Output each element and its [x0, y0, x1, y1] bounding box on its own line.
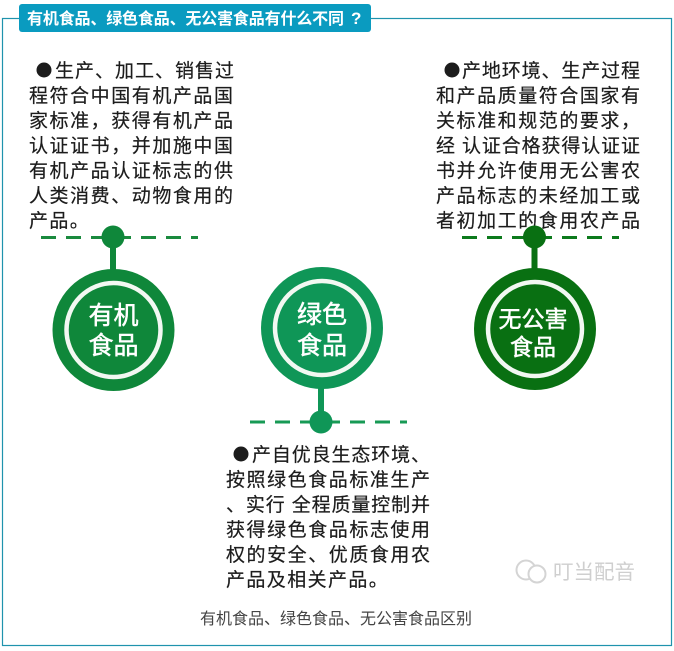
badge: pollution-free food: [462, 226, 619, 390]
caption: 有机食品、绿色食品、无公害食品区别: [200, 610, 472, 628]
text block: green food definition: 按照绿色食品标准生产: [226, 469, 430, 491]
text block: pollution-free food definition: 书并允许使用无公害农: [436, 160, 640, 182]
badge: pollution-free food: 无公害: [498, 306, 568, 332]
badge: green food: 食品: [297, 332, 347, 360]
text block: organic food definition: [29, 60, 234, 232]
text block: organic food definition: 有机产品认证标志的供: [29, 160, 233, 182]
text block: pollution-free food definition: 经 认证合格获得认证证: [436, 135, 640, 157]
text block: organic food definition: 生产、加工、销售过: [55, 60, 234, 82]
text block: organic food definition: 程符合中国有机产品国: [29, 85, 233, 107]
badge: organic food: 食品: [88, 332, 139, 360]
badge: green food: 绿色: [297, 301, 347, 329]
title banner: 有机食品、绿色食品、无公害食品有什么不同: [27, 9, 344, 28]
text block: pollution-free food definition: 关标准和规范的要求，: [436, 110, 640, 132]
text block: pollution-free food definition: 和产品质量符合国家有: [436, 85, 640, 107]
watermark: 叮当配音: [553, 561, 635, 584]
text block: organic food definition: 人类消费、动物食用的: [29, 185, 233, 207]
text block: green food definition: 获得绿色食品标志使用: [226, 519, 430, 541]
text block: pollution-free food definition: 产地环境、生产过程: [462, 60, 640, 82]
text block: green food definition: 权的安全、优质食用农: [226, 544, 430, 566]
text block: pollution-free food definition: 者初加工的食用农产品: [436, 210, 640, 232]
text block: green food definition: 产自优良生态环境、: [252, 444, 430, 466]
badge: organic food: [41, 226, 198, 391]
badge: green food: [250, 267, 407, 434]
text block: pollution-free food definition: 产品标志的未经加工或: [436, 185, 640, 207]
badge: organic food: 有机: [88, 302, 139, 330]
text block: green food definition: 、实行 全程质量控制并: [226, 494, 430, 516]
title banner: ?: [351, 9, 361, 28]
text block: green food definition: [226, 444, 430, 591]
badge: pollution-free food: 食品: [510, 334, 556, 360]
text block: green food definition: 产品及相关产品。: [226, 569, 389, 591]
text block: organic food definition: 认证证书，并加施中国: [29, 135, 233, 157]
text block: pollution-free food definition: [436, 60, 640, 232]
watermark: [516, 560, 635, 584]
title banner: [19, 4, 371, 32]
text block: organic food definition: 家标准，获得有机产品: [29, 110, 233, 132]
text block: organic food definition: 产品。: [29, 210, 90, 232]
